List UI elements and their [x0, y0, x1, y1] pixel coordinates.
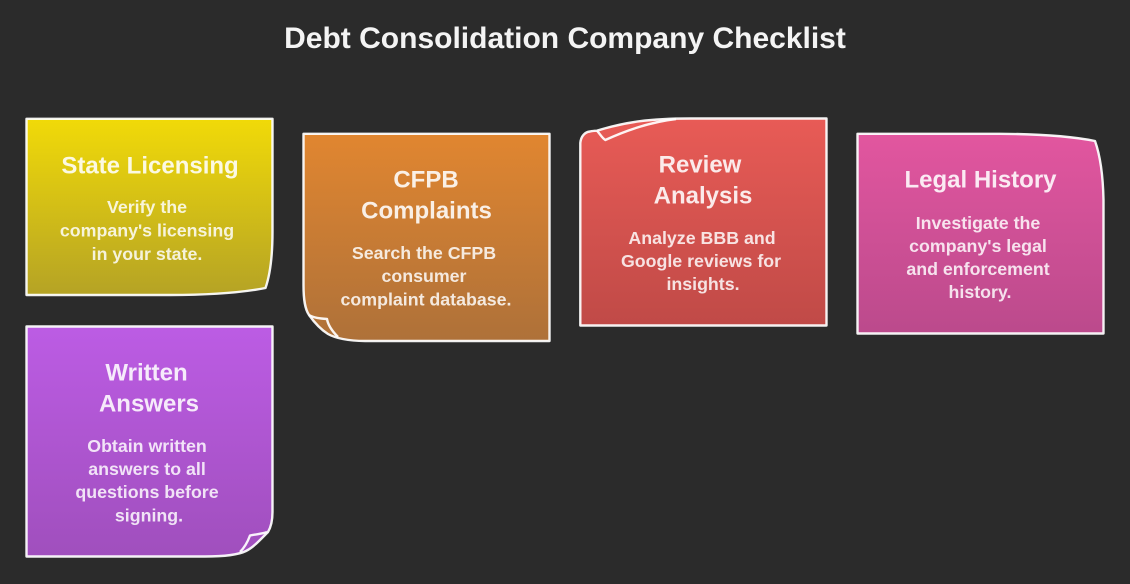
heading: Written Answers: Answers [99, 390, 199, 418]
text: State Licensing description: Verify the [107, 197, 187, 217]
text: Review Analysis description: Analyze BBB and [628, 228, 776, 248]
heading: Review Analysis: Analysis [654, 182, 752, 210]
text: Review Analysis description: Google reviews for [621, 251, 781, 271]
panel: Written Answers [26, 326, 272, 556]
heading: CFPB Complaints: CFPB [393, 166, 459, 194]
icon: folded corner bottom-left [309, 315, 338, 337]
panel: Legal History [858, 134, 1104, 334]
heading: Review Analysis: Review [659, 152, 742, 178]
title: Debt Consolidation Company Checklist [284, 22, 846, 55]
heading: Legal History: Legal History [904, 166, 1057, 194]
text: Legal History description: and enforcement [906, 259, 1050, 279]
panel: Review Analysis [580, 118, 826, 326]
icon: folded corner bottom-right [240, 532, 267, 552]
heading: CFPB Complaints: Complaints [361, 198, 492, 224]
heading: State Licensing: State Licensing [61, 152, 239, 180]
text: Written Answers description: signing. [115, 506, 183, 526]
text: Legal History description: history. [949, 282, 1011, 302]
text: CFPB Complaints description: Search the CFPB [352, 243, 496, 263]
panel: State Licensing [26, 119, 272, 295]
text: Legal History description: company's legal [909, 236, 1047, 256]
panel: CFPB Complaints [304, 134, 550, 341]
text: Written Answers description: questions before [75, 482, 219, 502]
text: State Licensing description: in your state. [92, 244, 202, 264]
text: Legal History description: Investigate the [916, 213, 1040, 233]
text: State Licensing description: company's licensing [60, 220, 234, 240]
text: Written Answers description: answers to all [88, 459, 206, 479]
heading: Written Answers: Written [105, 360, 188, 386]
text: Written Answers description: Obtain written [87, 436, 207, 456]
text: Review Analysis description: insights. [666, 274, 740, 294]
text: CFPB Complaints description: consumer [382, 266, 467, 286]
text: CFPB Complaints description: complaint database. [341, 290, 511, 310]
icon: folded corner top-left [597, 119, 676, 140]
